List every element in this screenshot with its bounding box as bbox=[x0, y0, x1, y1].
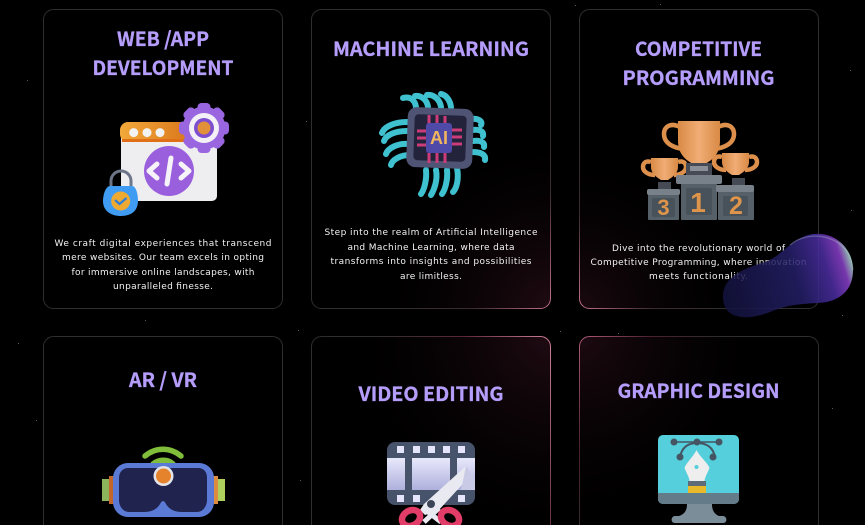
panel: web / app development bbox=[44, 10, 282, 308]
text block: competitive description bbox=[590, 244, 806, 282]
icon: trophies on podium bbox=[643, 121, 757, 220]
panel: video editing bbox=[312, 336, 550, 525]
panel: ar / vr bbox=[44, 336, 282, 525]
panel: graphic design bbox=[580, 336, 818, 525]
text block: machine learning description: and Machine Learning, where data bbox=[348, 243, 514, 253]
heading: web app development bbox=[94, 30, 233, 76]
icon: trophies on podium: 3 bbox=[657, 195, 670, 220]
heading: competitive programming: PROGRAMMING bbox=[622, 62, 774, 91]
icon: monitor with pen tool bbox=[658, 435, 739, 523]
text block: machine learning description: Step into the realm of Artificial Intelligence bbox=[324, 228, 538, 238]
text block: web description bbox=[54, 239, 272, 292]
decorative gradient blob bbox=[723, 234, 853, 317]
heading: web app development: DEVELOPMENT bbox=[92, 52, 234, 81]
text block: competitive description: meets functionality. bbox=[649, 272, 748, 282]
heading: graphic design: GRAPHIC DESIGN bbox=[618, 375, 780, 404]
text block: competitive description: Dive into the revolutionary world of bbox=[612, 244, 786, 254]
text block: web description: unparalleled finesse. bbox=[113, 282, 213, 292]
icon: browser window with gear and lock bbox=[103, 103, 229, 216]
text block: web description: mere websites. Our team excels in opting bbox=[62, 253, 264, 263]
panel: machine learning bbox=[312, 10, 550, 308]
icon: ai chip: AI bbox=[430, 128, 448, 148]
icon: vr headset bbox=[102, 449, 225, 517]
text block: machine learning description bbox=[324, 228, 538, 282]
heading: web app development: WEB /APP bbox=[117, 23, 209, 52]
text block: machine learning description: transforms into insights and possibilities bbox=[330, 257, 532, 267]
panel: competitive programming bbox=[580, 10, 818, 308]
icon: trophies on podium: 2 bbox=[729, 192, 743, 220]
heading: ar / vr: AR / VR bbox=[128, 364, 197, 393]
icon: trophies on podium: 1 bbox=[690, 187, 706, 218]
heading: competitive programming: COMPETITIVE bbox=[635, 33, 762, 62]
heading: machine learning: MACHINE LEARNING bbox=[333, 33, 529, 62]
icon: film strip and scissors bbox=[387, 442, 475, 525]
icon: ai chip bbox=[382, 94, 485, 195]
text block: competitive description: Competitive Programming, where innovation bbox=[590, 258, 806, 268]
text block: web description: for immersive online landscapes, with bbox=[72, 268, 254, 278]
heading: competitive programming bbox=[624, 41, 774, 86]
text block: web description: We craft digital experiences that transcend bbox=[54, 239, 272, 249]
text block: machine learning description: are limitless. bbox=[400, 272, 462, 282]
heading: video editing: VIDEO EDITING bbox=[357, 378, 504, 407]
